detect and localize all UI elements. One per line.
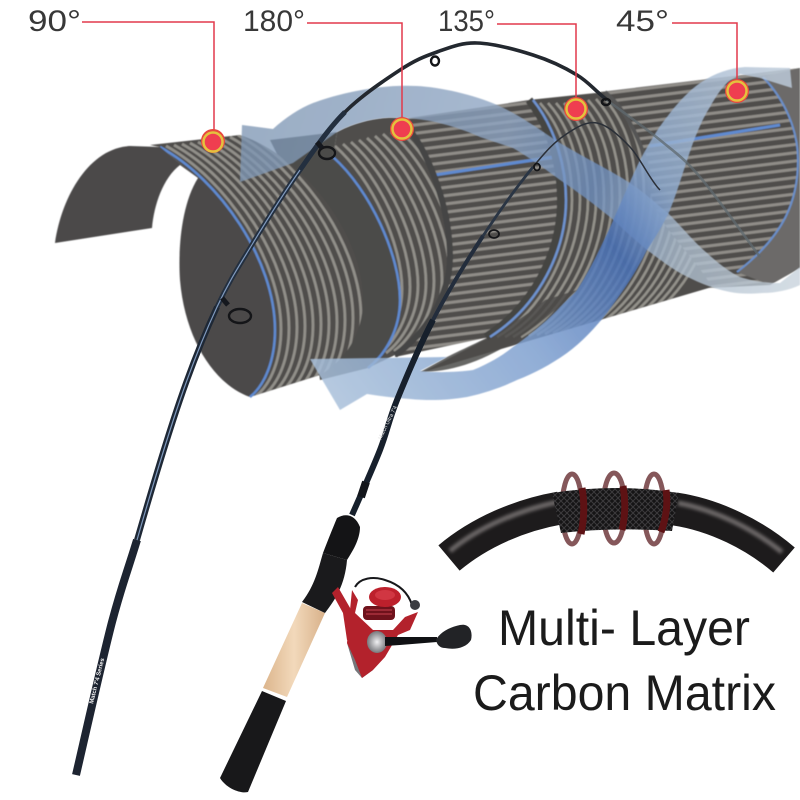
braided wrap: [552, 488, 679, 533]
cork grip: [263, 603, 325, 697]
angle callout 180: 180°: [243, 5, 305, 38]
caption: [473, 600, 776, 721]
ribbon: upper translucent arrow: [240, 86, 800, 294]
rod ferrule: [361, 482, 366, 497]
right tube: [675, 509, 784, 560]
caption: Carbon Matrix: [473, 665, 776, 721]
spinning reel: [332, 578, 472, 678]
silver hub: [367, 631, 387, 653]
guide feet: [222, 142, 322, 305]
angle callout 180: [243, 5, 414, 141]
rings behind wrap: [562, 473, 664, 544]
carbon tube cutaway: [55, 68, 800, 397]
right fishing rod: [352, 123, 660, 515]
unrolled flap: [55, 146, 198, 243]
fishing rod handle: [220, 515, 360, 792]
rod guide rings: [229, 56, 610, 323]
rear EVA grip: [220, 691, 286, 792]
tube section between layers 2 and 3: [395, 100, 567, 357]
left tube: [449, 508, 560, 558]
bail wire: [355, 578, 412, 605]
layer ring 2: [270, 118, 466, 380]
far-right tube section: [600, 68, 800, 310]
spool: [363, 587, 401, 620]
angle callout 135: 135°: [438, 5, 495, 38]
angle callout 45: [616, 5, 749, 103]
ring front bands: [581, 486, 667, 534]
angle callout 45: 45°: [616, 5, 669, 38]
left rod lettering: Match 7'4 Series: [89, 657, 106, 704]
handle knob: [436, 625, 472, 649]
reel seat: [302, 553, 347, 613]
reel stem: [332, 587, 362, 640]
layer ring 3: [420, 88, 716, 372]
angle callout 135: [438, 5, 588, 121]
caption: Multi- Layer: [498, 600, 750, 656]
dark end face: [160, 147, 275, 397]
left fishing rod: [76, 43, 760, 775]
handle arm: [385, 637, 437, 646]
right rod lettering: Match Ultra 7'4: [377, 405, 399, 441]
right rod guides: [489, 164, 540, 238]
carbon wrap sample: [449, 473, 784, 560]
reel rotor grey: [347, 643, 373, 678]
fore grip: [323, 515, 360, 560]
layer ring 1: [150, 134, 363, 397]
angle callout 90: 90°: [28, 5, 81, 38]
angle callout 90: [28, 5, 225, 153]
blue carbon edge line: [160, 147, 275, 397]
ribbon: lower blue arrow: [310, 67, 792, 410]
line roller: [410, 600, 420, 610]
reel body: [347, 590, 418, 678]
